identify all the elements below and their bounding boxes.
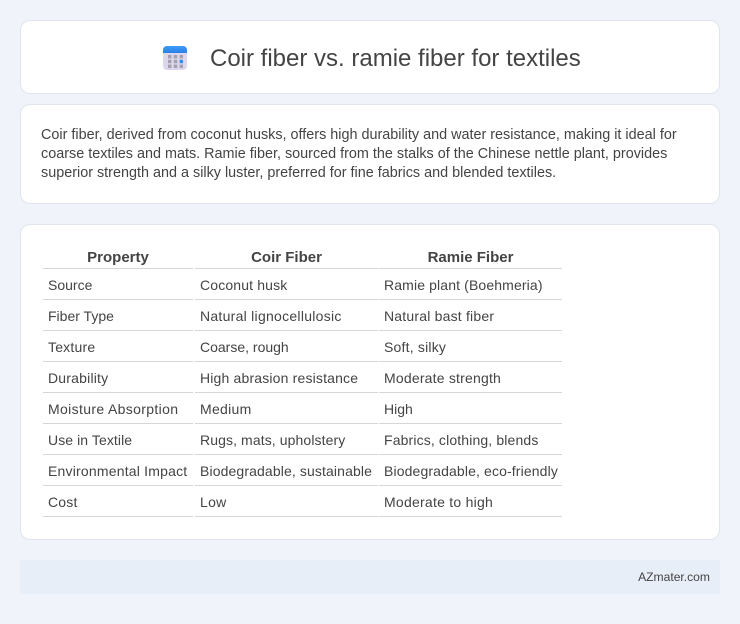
- row: moisture absorption: Medium: [200, 401, 252, 417]
- summary text: superior strength and a silky luster, preferred for fine fabrics and blended textiles.: [41, 165, 556, 181]
- table header: Property: [87, 249, 149, 266]
- row: use in textile: Rugs, mats, upholstery: [200, 432, 345, 448]
- icon: calendar: [163, 46, 187, 70]
- row: use in textile: Use in Textile: [48, 432, 132, 448]
- row: texture: Texture: [48, 339, 95, 355]
- row: cost: Low: [200, 494, 227, 510]
- row: environmental impact: Biodegradable, sustainable: [200, 463, 372, 479]
- row: durability: Moderate strength: [384, 370, 501, 386]
- row: environmental impact: Biodegradable, eco-friendly: [384, 463, 558, 479]
- row: durability: Durability: [48, 370, 108, 386]
- row: moisture absorption: [43, 401, 562, 424]
- footer bar: [20, 560, 720, 594]
- row: texture: Soft, silky: [384, 339, 446, 355]
- row: source: Coconut husk: [200, 277, 287, 293]
- row: use in textile: [43, 432, 562, 455]
- footer brand text: AZmater.com: [638, 570, 710, 584]
- panel: title card: [20, 20, 720, 94]
- summary text: coarse textiles and mats. Ramie fiber, sourced from the stalks of the Chinese nettle plant, provides: [41, 146, 667, 162]
- summary text: [41, 127, 677, 181]
- row: durability: High abrasion resistance: [200, 370, 358, 386]
- panel: table card: [20, 224, 720, 540]
- row: durability: [43, 370, 562, 393]
- row: fiber type: Natural lignocellulosic: [200, 308, 342, 324]
- table header: [43, 249, 562, 269]
- row: fiber type: [43, 308, 562, 331]
- row: cost: Moderate to high: [384, 494, 493, 510]
- row: moisture absorption: High: [384, 401, 413, 417]
- row: cost: [43, 494, 562, 517]
- row: fiber type: Natural bast fiber: [384, 308, 494, 324]
- row: moisture absorption: Moisture Absorption: [48, 401, 178, 417]
- row: cost: Cost: [48, 494, 78, 510]
- row: use in textile: Fabrics, clothing, blends: [384, 432, 538, 448]
- row: source: Source: [48, 277, 92, 293]
- row: source: [43, 277, 562, 300]
- row: environmental impact: Environmental Impact: [48, 463, 187, 479]
- summary text: Coir fiber, derived from coconut husks, offers high durability and water resistance, making it ideal for: [41, 127, 677, 143]
- row: environmental impact: [43, 463, 562, 486]
- table header: Ramie Fiber: [428, 249, 513, 266]
- title: Coir fiber vs. ramie fiber for textiles: [210, 45, 581, 72]
- row: fiber type: Fiber Type: [48, 308, 114, 324]
- row: texture: [43, 339, 562, 362]
- panel: summary card: [20, 104, 720, 204]
- row: texture: Coarse, rough: [200, 339, 289, 355]
- row: source: Ramie plant (Boehmeria): [384, 277, 543, 293]
- table header: Coir Fiber: [251, 249, 322, 266]
